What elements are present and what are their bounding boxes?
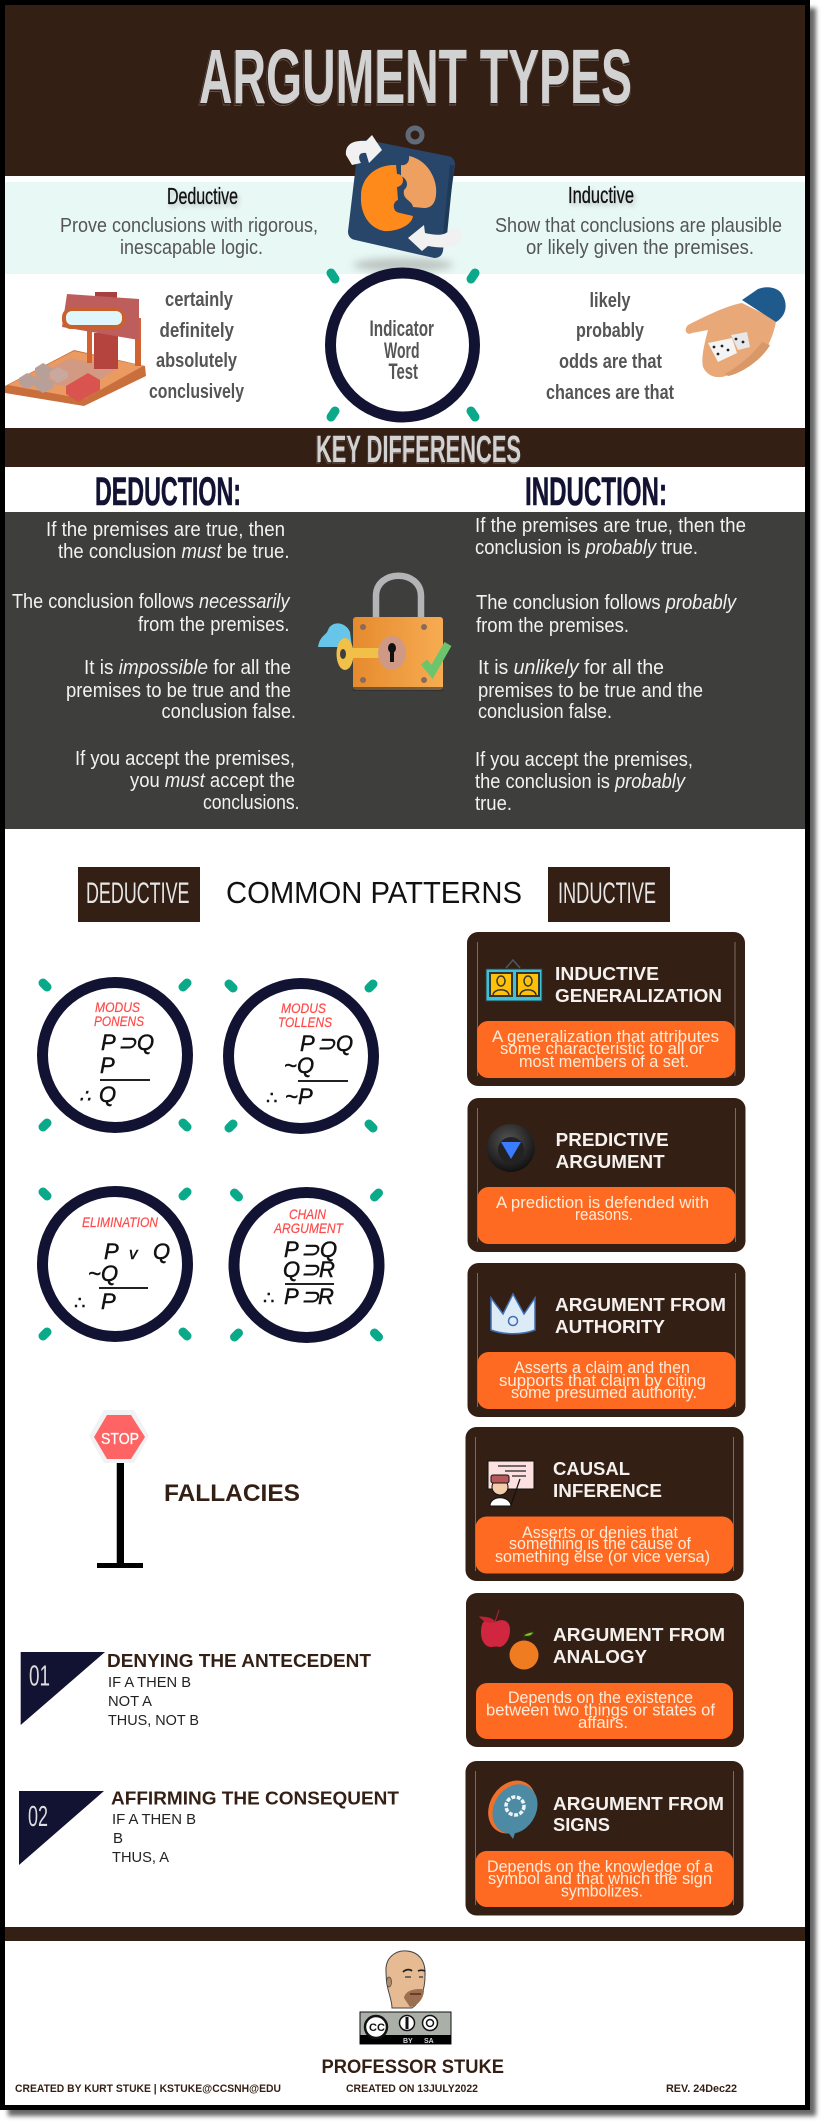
fallacy 01: denying the antecedent: NOT A xyxy=(108,1693,152,1710)
pattern: chain argument: CHAIN xyxy=(289,1206,327,1222)
word list panel: inductive indicators xyxy=(546,290,674,404)
pattern: modus ponens: ∴ xyxy=(79,1086,91,1106)
card: inductive generalization xyxy=(467,932,745,1086)
induction statements: premises to be true and the xyxy=(478,680,703,702)
induction statements: It is unlikely for all the xyxy=(478,657,664,679)
fallacy 01: denying the antecedent: 01 xyxy=(29,1660,50,1692)
fallacy 01: denying the antecedent: IF A THEN B xyxy=(108,1674,191,1691)
icon: apple and orange xyxy=(480,1610,538,1670)
pattern: elimination: P xyxy=(104,1239,119,1264)
deduction statements: The conclusion follows necessarily xyxy=(12,591,290,613)
card: inductive generalization: GENERALIZATION xyxy=(555,985,722,1006)
deductive definition: inescapable logic. xyxy=(120,237,263,259)
deductive definition: Deductive xyxy=(169,186,240,212)
inductive definition: Inductive xyxy=(570,185,636,211)
pattern: modus ponens: P⊃Q xyxy=(101,1030,154,1055)
card: causal inference: CAUSAL xyxy=(553,1458,630,1479)
cc by-sa license badge: CC xyxy=(369,2022,385,2034)
fallacy 02: affirming the consequent xyxy=(19,1788,399,1866)
pattern: elimination: Q xyxy=(153,1239,170,1264)
induction statements: true. xyxy=(475,793,512,815)
deduction statements: you must accept the xyxy=(130,770,295,792)
deduction statements: from the premises. xyxy=(138,614,290,636)
word list panel: deductive indicators xyxy=(149,289,245,403)
card: predictive argument: ARGUMENT xyxy=(556,1151,665,1172)
icon: tablet puzzle xyxy=(346,128,462,272)
badge: inductive xyxy=(548,867,670,922)
induction statements xyxy=(475,515,746,815)
card: causal inference xyxy=(466,1427,744,1581)
card: argument from authority xyxy=(468,1263,746,1417)
fallacy 02: affirming the consequent: 02 xyxy=(28,1801,48,1833)
card: inductive generalization: INDUCTIVE xyxy=(555,963,659,984)
card: argument from signs: Depends on the knowledge of a xyxy=(487,1857,714,1876)
cc by-sa license badge: BY xyxy=(403,2038,413,2045)
card: argument from analogy: Depends on the existence xyxy=(508,1688,693,1707)
word list panel: inductive indicators: odds are that xyxy=(559,351,662,373)
pattern: modus ponens: MODUS xyxy=(95,999,141,1015)
deduction statements: the conclusion must be true. xyxy=(58,541,290,563)
deduction statements: It is impossible for all the xyxy=(84,657,291,679)
pattern: chain argument: P⊃Q xyxy=(284,1237,337,1262)
deductive definition: Deductive xyxy=(167,183,238,209)
icon: hand with dice xyxy=(686,287,786,377)
card: argument from analogy xyxy=(466,1593,744,1747)
heading: induction: INDUCTION: xyxy=(525,470,667,514)
pattern: modus tollens: TOLLENS xyxy=(278,1014,333,1030)
card: argument from signs xyxy=(466,1761,744,1916)
icon: portraits frame xyxy=(486,960,542,1001)
pattern: modus tollens: ~P xyxy=(285,1084,313,1109)
card: argument from signs: ARGUMENT FROM xyxy=(553,1793,724,1814)
heading: common patterns: COMMON PATTERNS xyxy=(226,875,522,910)
indicator word test circle: Test xyxy=(388,359,418,384)
deductive definition xyxy=(60,183,318,259)
pattern: modus tollens: ~Q xyxy=(284,1053,314,1078)
inductive definition: Inductive xyxy=(568,182,634,208)
word list panel: inductive indicators: likely xyxy=(590,290,631,312)
induction statements: If the premises are true, then the xyxy=(475,515,746,537)
card: argument from signs: symbol and that which the sign xyxy=(488,1869,712,1888)
key differences band: KEY DIFFERENCES xyxy=(315,430,521,472)
card: predictive argument: A prediction is defended with xyxy=(496,1193,709,1212)
card: argument from signs: SIGNS xyxy=(553,1814,610,1835)
card: argument from signs: symbolizes. xyxy=(561,1882,643,1900)
badge: deductive xyxy=(78,867,200,922)
induction statements: If you accept the premises, xyxy=(475,749,693,771)
pattern: modus ponens: PONENS xyxy=(94,1013,145,1029)
heading: deduction: DEDUCTION: xyxy=(95,470,241,514)
pattern: modus ponens: P xyxy=(100,1053,115,1078)
card: causal inference: something is the cause of xyxy=(509,1534,691,1553)
header band xyxy=(5,5,805,176)
credits line: REV. 24Dec22 xyxy=(666,2083,737,2095)
fallacy 01: denying the antecedent xyxy=(21,1651,371,1729)
card: inductive generalization: most members of a set. xyxy=(519,1052,689,1071)
key differences band: KEY DIFFERENCES xyxy=(316,429,521,471)
badge: inductive: INDUCTIVE xyxy=(558,877,656,910)
fallacy 02: affirming the consequent: B xyxy=(113,1830,123,1847)
icon: calculator machine xyxy=(5,292,146,406)
pattern: chain argument: ARGUMENT xyxy=(273,1220,344,1236)
icon: magic eight ball xyxy=(487,1124,535,1172)
icon: padlock with key xyxy=(318,576,448,691)
pattern: elimination: ELIMINATION xyxy=(82,1214,159,1230)
card: predictive argument: reasons. xyxy=(575,1205,633,1224)
card: argument from authority: supports that claim by citing xyxy=(499,1371,706,1390)
induction statements: conclusion false. xyxy=(478,701,612,723)
card: argument from authority: some presumed authority. xyxy=(511,1383,697,1402)
fallacy 01: denying the antecedent: THUS, NOT B xyxy=(108,1712,199,1729)
word list panel: deductive indicators: definitely xyxy=(160,320,235,342)
cc by-sa license badge: SA xyxy=(424,2038,434,2045)
icon: crown xyxy=(491,1294,535,1334)
pattern: chain argument: Q⊃R xyxy=(283,1257,335,1282)
card: argument from analogy: ARGUMENT FROM xyxy=(553,1624,725,1645)
pattern: modus tollens: P⊃Q xyxy=(300,1031,353,1056)
deduction statements xyxy=(12,519,300,814)
cc by-sa license badge xyxy=(360,2012,451,2045)
deduction statements: If you accept the premises, xyxy=(75,748,295,770)
pattern: elimination: v xyxy=(129,1244,139,1263)
card: argument from authority: Asserts a claim and then xyxy=(514,1358,690,1377)
card: argument from analogy: affairs. xyxy=(578,1713,628,1732)
word list panel: deductive indicators: absolutely xyxy=(156,350,238,372)
credits line: CREATED ON 13JULY2022 xyxy=(346,2083,478,2095)
word list panel: deductive indicators: certainly xyxy=(165,289,234,311)
key differences band xyxy=(5,428,805,472)
inductive definition: Show that conclusions are plausible xyxy=(495,215,782,237)
pattern: modus ponens xyxy=(42,982,188,1128)
card: predictive argument xyxy=(468,1098,746,1252)
card: inductive generalization: A generalization that attributes xyxy=(492,1027,719,1046)
fallacy 02: affirming the consequent: THUS, A xyxy=(112,1849,169,1866)
deduction statements: conclusion false. xyxy=(162,701,296,723)
card: argument from authority: ARGUMENT FROM xyxy=(555,1294,726,1315)
credits line xyxy=(15,2083,737,2095)
word list panel: inductive indicators: chances are that xyxy=(546,382,674,404)
fallacy 02: affirming the consequent: AFFIRMING THE CONSEQUENT xyxy=(111,1788,399,1808)
inductive definition: or likely given the premises. xyxy=(526,237,754,259)
fallacy 01: denying the antecedent: DENYING THE ANTECEDENT xyxy=(107,1651,371,1671)
indicator word test circle: Indicator xyxy=(370,316,434,341)
icon: professor portrait xyxy=(386,1951,425,2008)
pattern: modus tollens: ∴ xyxy=(266,1088,277,1108)
deduction statements: premises to be true and the xyxy=(66,680,291,702)
induction statements: from the premises. xyxy=(476,615,629,637)
card: causal inference: Asserts or denies that xyxy=(522,1523,678,1542)
deductive definition: Prove conclusions with rigorous, xyxy=(60,215,318,237)
pattern: chain argument: P⊃R xyxy=(284,1284,334,1309)
induction statements: the conclusion is probably xyxy=(475,771,686,793)
fallacy 02: affirming the consequent: IF A THEN B xyxy=(112,1811,196,1828)
card: argument from authority: AUTHORITY xyxy=(555,1316,666,1337)
pattern: modus tollens: MODUS xyxy=(281,1000,327,1016)
word list panel: deductive indicators: conclusively xyxy=(149,381,245,403)
card: argument from analogy: between two things or states of xyxy=(486,1700,715,1720)
pattern: elimination: ~Q xyxy=(88,1261,118,1286)
icon: stop sign: STOP xyxy=(101,1431,139,1448)
pattern: elimination xyxy=(42,1192,188,1336)
pattern: elimination: P xyxy=(101,1289,116,1314)
card: predictive argument: PREDICTIVE xyxy=(556,1129,669,1150)
dark comparison panel xyxy=(5,512,805,829)
badge: deductive: DEDUCTIVE xyxy=(86,877,190,910)
footer band xyxy=(5,1927,805,1941)
professor name: PROFESSOR STUKE xyxy=(322,2057,504,2078)
indicator word test circle: Word xyxy=(384,338,420,363)
word list panel: inductive indicators: probably xyxy=(576,320,645,342)
mint definitions band xyxy=(5,182,805,274)
induction statements: The conclusion follows probably xyxy=(476,592,737,614)
deduction statements: If the premises are true, then xyxy=(46,519,285,541)
title xyxy=(198,34,632,122)
pattern: chain argument: ∴ xyxy=(263,1288,274,1308)
card: causal inference: INFERENCE xyxy=(553,1480,662,1501)
heading: fallacies: FALLACIES xyxy=(164,1480,300,1507)
icon: gear speech bubble xyxy=(479,1772,547,1842)
induction statements: conclusion is probably true. xyxy=(475,537,698,559)
pattern: chain argument xyxy=(234,1192,379,1338)
indicator word test circle xyxy=(330,273,475,417)
inductive definition xyxy=(495,182,782,259)
credits line: CREATED BY KURT STUKE | KSTUKE@CCSNH@EDU xyxy=(15,2083,281,2095)
card: causal inference: something else (or vice versa) xyxy=(495,1547,710,1566)
pattern: elimination: ∴ xyxy=(74,1293,85,1313)
icon: lecturer at board xyxy=(488,1461,534,1506)
card: argument from analogy: ANALOGY xyxy=(553,1646,648,1667)
card: inductive generalization: some characteristic to all or xyxy=(500,1039,704,1058)
pattern: modus tollens xyxy=(228,984,374,1128)
deduction statements: conclusions. xyxy=(203,792,300,814)
icon: stop sign xyxy=(89,1410,149,1568)
pattern: modus ponens: Q xyxy=(99,1082,116,1107)
